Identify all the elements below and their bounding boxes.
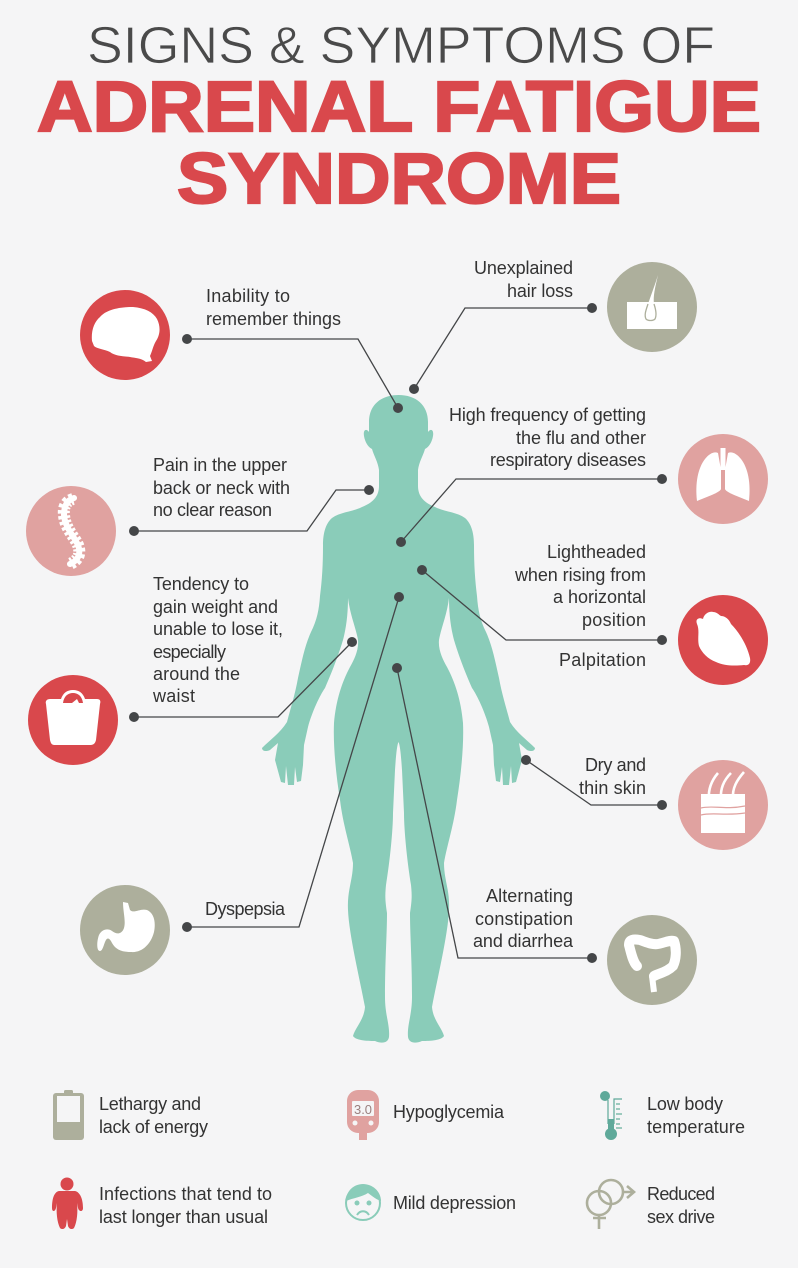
label: lethargy: Lethargy and bbox=[99, 1094, 201, 1114]
label: dry skin bbox=[579, 755, 646, 798]
icon: sad face bbox=[346, 1184, 381, 1220]
icon: stomach bbox=[80, 885, 170, 975]
label: lightheaded: when rising from bbox=[514, 565, 646, 585]
label: weight: around the bbox=[153, 664, 240, 684]
label: hair loss: Unexplained bbox=[474, 258, 573, 278]
icon: person bbox=[52, 1178, 83, 1229]
icon: heart bbox=[678, 595, 768, 685]
label: lethargy bbox=[99, 1094, 208, 1137]
label: weight: unable to lose it, bbox=[153, 619, 283, 639]
icon: glucometer: 3.0 bbox=[354, 1102, 372, 1117]
label: flu: the flu and other bbox=[516, 428, 646, 448]
label: weight: waist bbox=[152, 686, 195, 706]
label: dyspepsia: Dyspepsia bbox=[205, 899, 286, 919]
icon: thermometer bbox=[600, 1091, 622, 1140]
icon: hair follicle bbox=[607, 262, 697, 352]
label: back pain bbox=[153, 455, 290, 520]
label: flu: respiratory diseases bbox=[490, 450, 646, 470]
label: lightheaded bbox=[514, 542, 646, 630]
title: SIGNS & SYMPTOMS OF bbox=[87, 17, 715, 75]
label: temperature: temperature bbox=[647, 1117, 745, 1137]
icon: brain bbox=[80, 290, 170, 380]
label: weight: gain weight and bbox=[153, 597, 278, 617]
label: memory bbox=[206, 286, 341, 329]
label: weight bbox=[152, 574, 283, 706]
connector lines and dots bbox=[129, 303, 667, 963]
icon: spine bbox=[26, 486, 116, 576]
label: temperature: Low body bbox=[647, 1094, 723, 1114]
title bbox=[37, 17, 761, 219]
body silhouette bbox=[262, 395, 535, 1043]
icon: weight scale bbox=[28, 675, 118, 765]
label: lightheaded: a horizontal bbox=[553, 587, 646, 607]
label: palpitation: Palpitation bbox=[559, 650, 646, 670]
icon: lungs bbox=[678, 434, 768, 524]
label: lethargy: lack of energy bbox=[99, 1117, 208, 1137]
label: weight: especially bbox=[153, 642, 226, 662]
label: back pain: no clear reason bbox=[153, 500, 272, 520]
label: back pain: Pain in the upper bbox=[153, 455, 287, 475]
label: dry skin: Dry and bbox=[585, 755, 646, 775]
label: hair loss bbox=[474, 258, 573, 301]
title: SYNDROME bbox=[177, 140, 621, 219]
label: infections: Infections that tend to bbox=[99, 1184, 272, 1204]
label: sex drive: Reduced bbox=[647, 1184, 715, 1204]
icon: colon bbox=[607, 915, 697, 1005]
label: flu: High frequency of getting bbox=[449, 405, 646, 425]
label: infections: last longer than usual bbox=[99, 1207, 268, 1227]
label: sex drive: sex drive bbox=[647, 1207, 715, 1227]
icon: skin bbox=[678, 760, 768, 850]
label: dry skin: thin skin bbox=[579, 778, 646, 798]
label: hair loss: hair loss bbox=[507, 281, 573, 301]
label: digestion: and diarrhea bbox=[473, 931, 574, 951]
label: digestion: constipation bbox=[475, 909, 573, 929]
title: ADRENAL FATIGUE bbox=[37, 68, 761, 147]
icon: gender symbols bbox=[587, 1180, 634, 1229]
label: weight: Tendency to bbox=[153, 574, 249, 594]
label: flu bbox=[449, 405, 646, 470]
label: hypoglycemia: Hypoglycemia bbox=[393, 1102, 505, 1122]
label: depression: Mild depression bbox=[393, 1193, 516, 1213]
label: digestion: Alternating bbox=[486, 886, 573, 906]
label: infections bbox=[99, 1184, 272, 1227]
label: temperature bbox=[647, 1094, 745, 1137]
label: lightheaded: Lightheaded bbox=[547, 542, 646, 562]
label: back pain: back or neck with bbox=[153, 478, 290, 498]
label: lightheaded: position bbox=[582, 610, 646, 630]
label: memory: remember things bbox=[206, 309, 341, 329]
label: sex drive bbox=[647, 1184, 715, 1227]
label: memory: Inability to bbox=[206, 286, 290, 306]
icon: battery bbox=[53, 1090, 84, 1140]
label: digestion bbox=[473, 886, 574, 951]
icon: glucometer bbox=[347, 1090, 379, 1140]
